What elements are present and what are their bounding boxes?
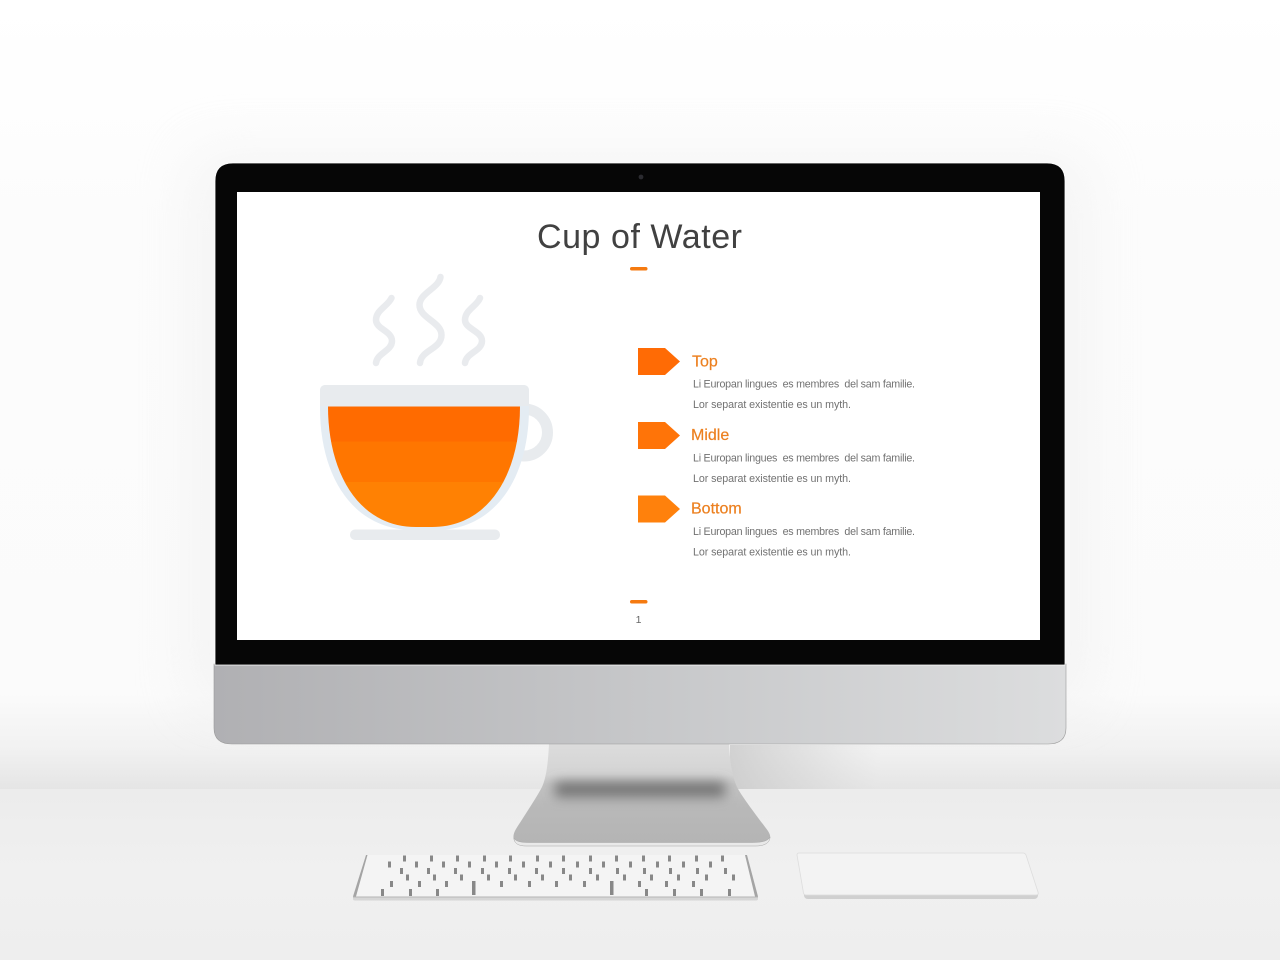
description: Lor separat existentie es un myth. xyxy=(693,546,851,558)
item: Top xyxy=(638,348,915,411)
trackpad xyxy=(797,853,1038,899)
cup inner rim xyxy=(320,385,529,406)
description: Li Europan lingues es membres del sam familie. xyxy=(693,452,915,464)
monitor halo on wall xyxy=(190,150,1090,710)
icon: arrow tag xyxy=(638,348,680,375)
heading: Midle xyxy=(691,427,729,444)
item: Midle xyxy=(638,422,915,485)
monitor chin xyxy=(214,664,1066,744)
footer accent bar xyxy=(630,600,648,604)
cup body xyxy=(320,385,529,530)
monitor black bezel xyxy=(215,163,1065,665)
icon: cup of hot drink xyxy=(320,277,548,540)
icon: arrow tag xyxy=(638,422,680,449)
description: Lor separat existentie es un myth. xyxy=(693,473,851,485)
monitor xyxy=(214,163,1066,744)
keyboard key gaps xyxy=(381,856,735,896)
desk surface xyxy=(0,789,1280,960)
screen xyxy=(237,192,1040,640)
heading: Top xyxy=(692,354,718,370)
description: Li Europan lingues es membres del sam familie. xyxy=(693,526,915,538)
keyboard xyxy=(353,855,758,900)
title accent bar xyxy=(630,267,648,270)
page number: 1 xyxy=(636,614,642,626)
description xyxy=(693,378,915,411)
description xyxy=(693,452,915,485)
icon: steam xyxy=(376,277,482,363)
title: Cup of Water xyxy=(537,218,742,256)
description: Lor separat existentie es un myth. xyxy=(693,399,851,411)
description: Li Europan lingues es membres del sam familie. xyxy=(693,378,915,390)
monitor stand xyxy=(513,744,770,846)
cup handle xyxy=(500,409,548,456)
saucer xyxy=(350,530,500,540)
icon: arrow tag xyxy=(638,496,680,522)
webcam xyxy=(639,175,643,179)
description xyxy=(693,526,915,558)
heading: Bottom xyxy=(691,500,742,518)
keyboard body xyxy=(353,896,758,900)
stand shadow on wall xyxy=(730,745,880,789)
item: Bottom xyxy=(638,496,915,558)
